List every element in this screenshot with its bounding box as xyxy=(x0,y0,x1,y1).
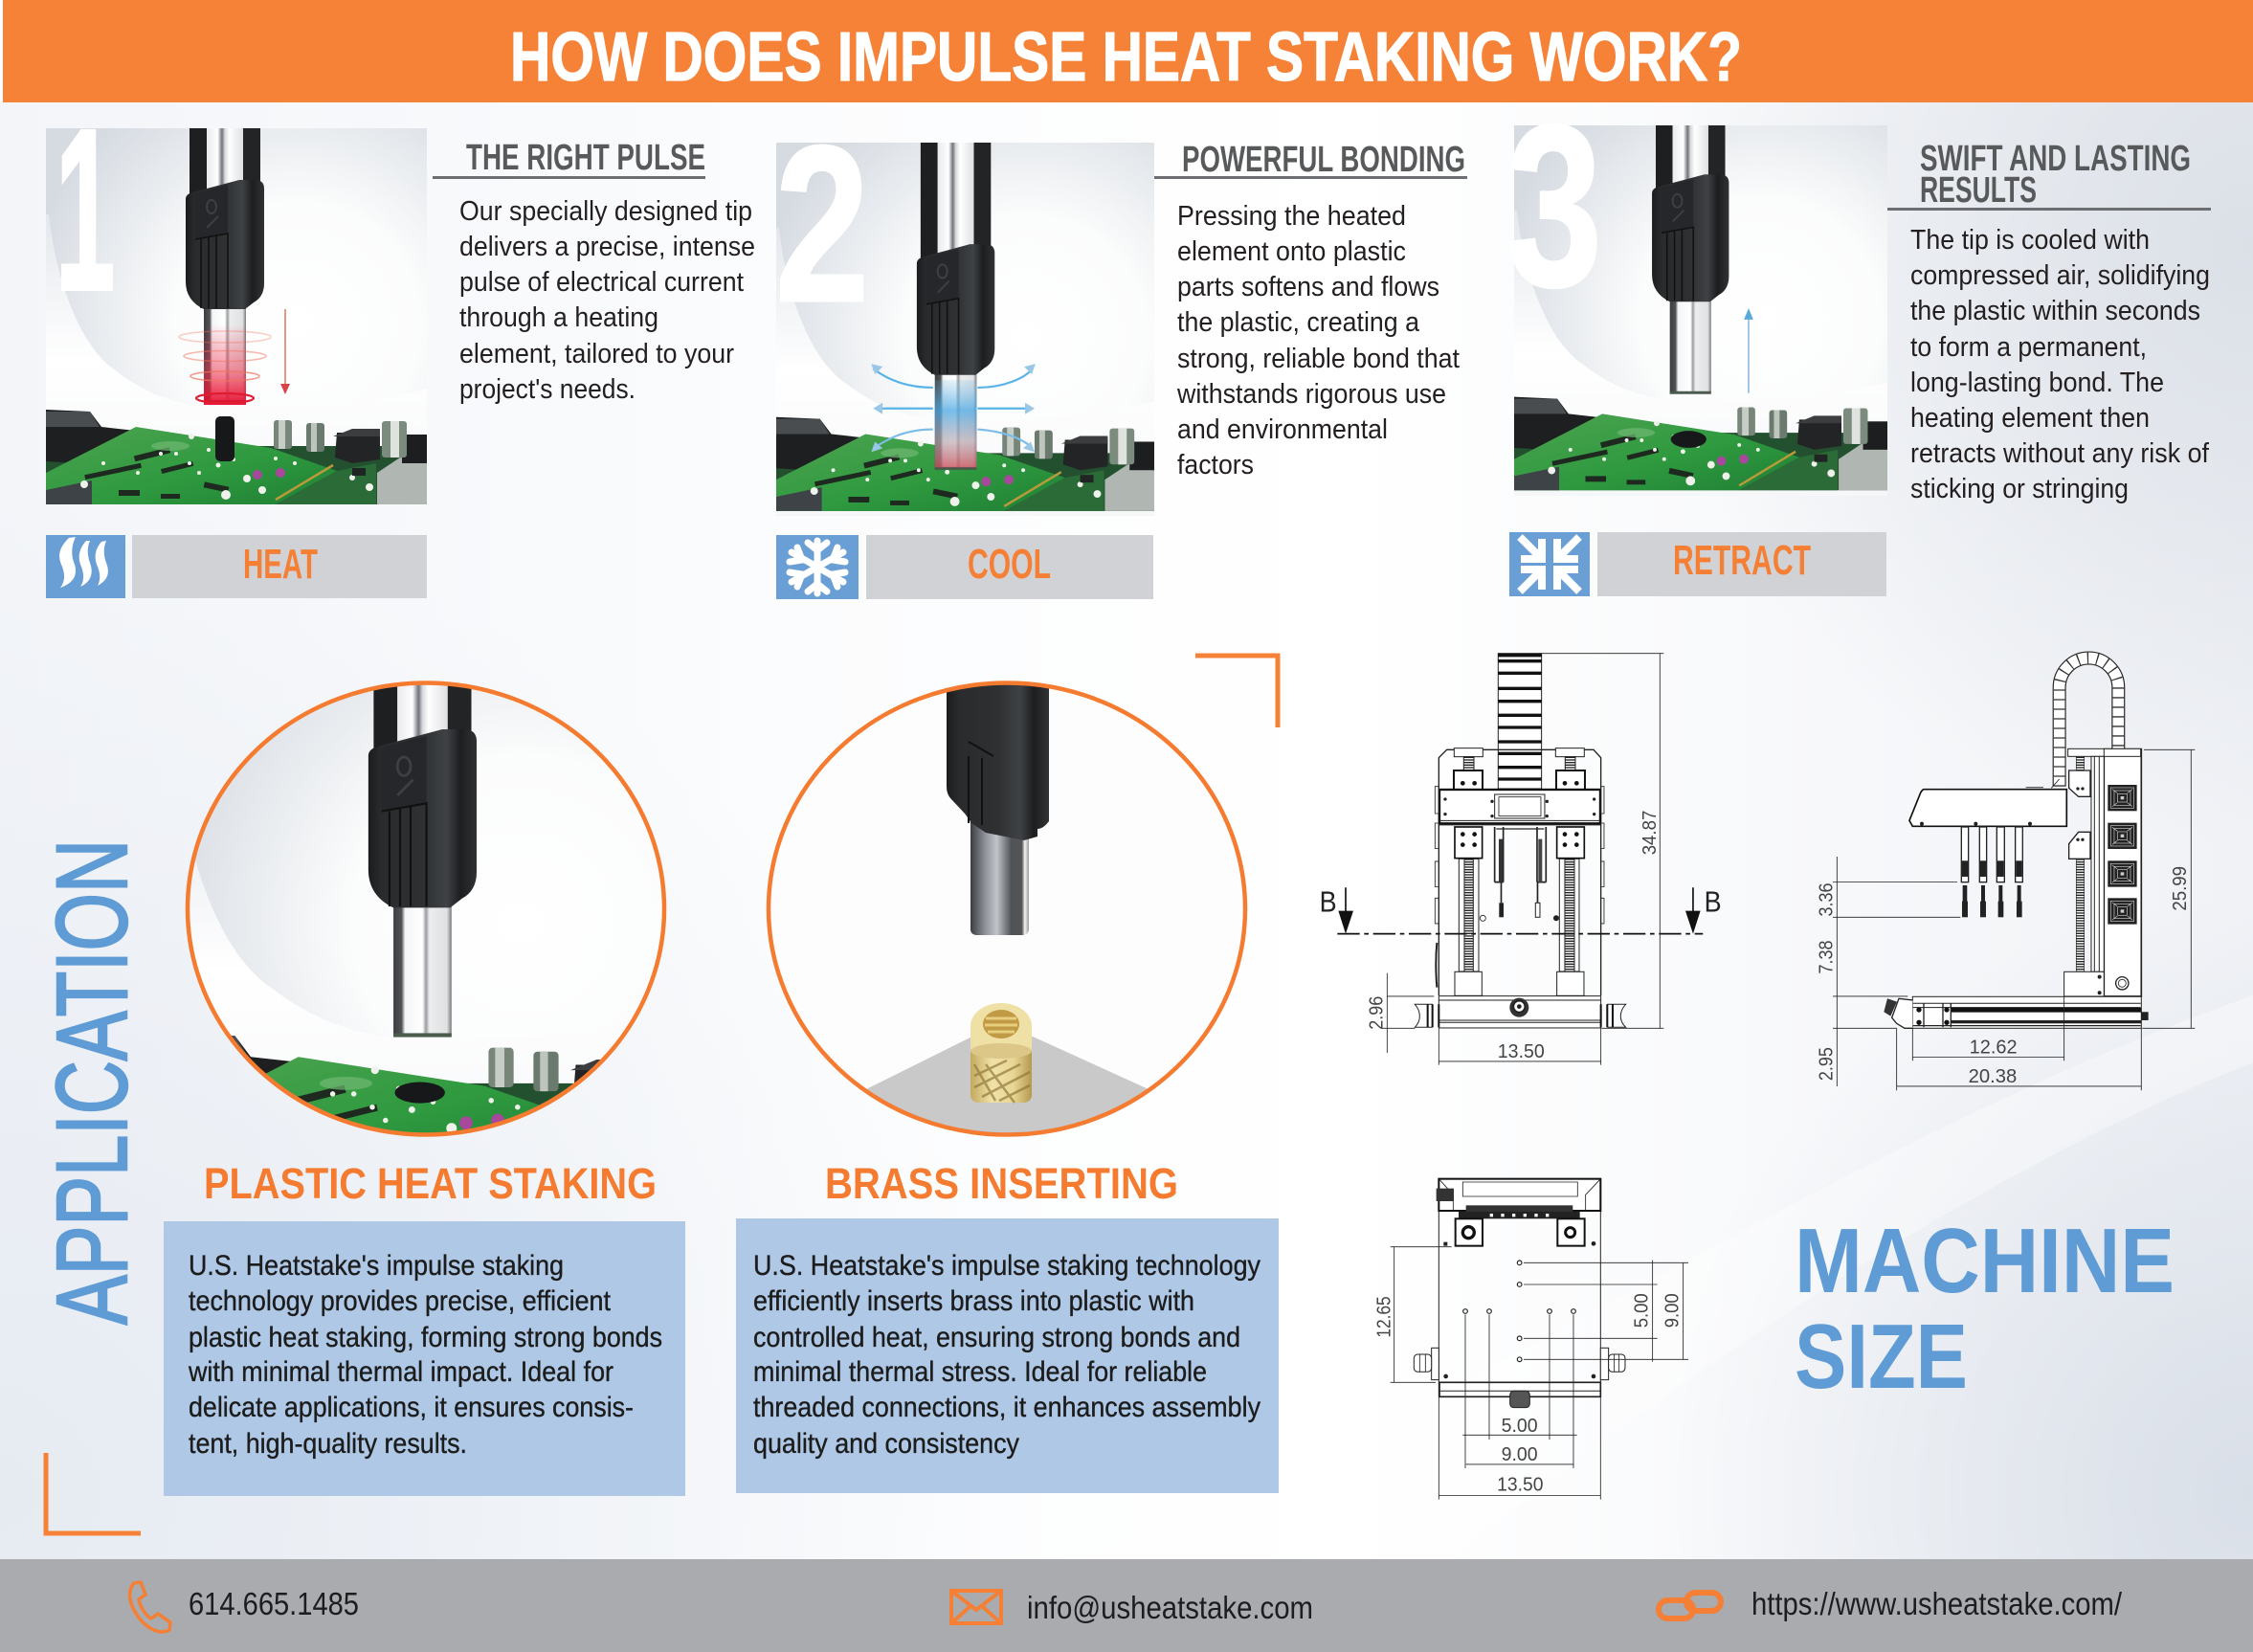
text: step 1 description: project's needs. xyxy=(459,374,636,405)
text box: brass inserting xyxy=(736,1218,1279,1493)
icon: retract arrows xyxy=(1509,532,1590,596)
panel: brass inserting xyxy=(736,670,1279,1493)
text: step 2 description: Pressing the heated xyxy=(1177,201,1406,232)
heading: machine size xyxy=(1795,1210,2175,1408)
label bar: retract xyxy=(1597,532,1886,596)
label bar: retract: RETRACT xyxy=(1673,537,1811,584)
icon: snowflake xyxy=(776,535,859,599)
photo: heat tip above PCB xyxy=(46,128,427,504)
text: step 3 description: to form a permanent, xyxy=(1910,332,2147,363)
technical drawing: front view xyxy=(1320,654,1722,1065)
technical drawing: side view: 3.36 xyxy=(1816,882,1838,916)
header banner xyxy=(3,0,2253,102)
text: step 3 description: sticking or stringing xyxy=(1910,474,2129,504)
title: HOW DOES IMPULSE HEAT STAKING WORK? xyxy=(510,19,1742,96)
photo: tip pressed on PCB with air flow xyxy=(776,143,1154,516)
technical drawing: front view: 34.87 xyxy=(1639,811,1661,855)
technical drawing: side view: 25.99 xyxy=(2169,866,2191,911)
heading: brass inserting: BRASS INSERTING xyxy=(825,1159,1178,1208)
text box: plastic heat staking xyxy=(164,1221,685,1496)
decorative bracket top right of application xyxy=(1195,656,1278,727)
decorative bracket bottom left of application xyxy=(46,1453,141,1533)
photo: tip retracted above bonded stake xyxy=(1514,125,1887,490)
text: step 3 description: The tip is cooled with xyxy=(1910,225,2150,256)
text box: brass inserting: U.S. Heatstake's impulse staking technology xyxy=(753,1250,1260,1282)
panel: step 2 cool xyxy=(775,51,1467,599)
text box: plastic heat staking: tent, high-quality results. xyxy=(189,1428,467,1460)
text box: brass inserting: minimal thermal stress. Ideal for reliable xyxy=(753,1356,1207,1388)
technical drawing: front view: 2.96 xyxy=(1366,996,1388,1030)
text: step 2 description: and environmental xyxy=(1177,414,1388,445)
text box: brass inserting: controlled heat, ensuring strong bonds and xyxy=(753,1322,1240,1353)
text box: brass inserting: threaded connections, it enhances assembly xyxy=(753,1392,1260,1423)
heading: the right pulse: THE RIGHT PULSE xyxy=(466,138,705,178)
icon: envelope xyxy=(951,1591,1001,1623)
circle photo: brass insert and tip xyxy=(766,670,1248,1149)
technical drawing: side view: 12.62 xyxy=(1970,1037,2018,1059)
panel: step 1 heat xyxy=(46,0,755,598)
step number 3: 3 xyxy=(1506,78,1602,334)
text: step 3 description: compressed air, solidifying xyxy=(1910,260,2210,291)
technical drawing: top view: 12.65 xyxy=(1372,1296,1394,1338)
text box: plastic heat staking: with minimal thermal impact. Ideal for xyxy=(188,1356,613,1388)
text: step 2 description: strong, reliable bond that xyxy=(1177,344,1460,374)
heading: machine size: MACHINE xyxy=(1795,1210,2175,1312)
panel: step 1 heat: 1 xyxy=(56,81,115,338)
text box: brass inserting: quality and consistency xyxy=(753,1428,1019,1460)
label bar: heat xyxy=(132,535,427,598)
text: step 2 description: withstands rigorous use xyxy=(1176,379,1446,410)
step number 2: 2 xyxy=(775,100,869,348)
heading: powerful bonding: POWERFUL BONDING xyxy=(1182,140,1465,180)
text: step 2 description: factors xyxy=(1177,450,1254,480)
technical drawing: side view: 2.95 xyxy=(1816,1047,1838,1081)
heading: swift and lasting results: RESULTS xyxy=(1920,170,2037,211)
contact: phone number: 614.665.1485 xyxy=(189,1586,359,1621)
technical drawing: top view: 9.00 xyxy=(1661,1293,1683,1328)
technical drawing: top view: 5.00 xyxy=(1502,1415,1538,1437)
icon: link xyxy=(1659,1593,1721,1619)
technical drawing: top view: 5.00 xyxy=(1631,1293,1653,1328)
text: step 1 description: through a heating xyxy=(459,302,658,333)
footer bar xyxy=(0,1559,2253,1652)
text: step 2 description: the plastic, creating a xyxy=(1177,307,1420,338)
text: step 3 description xyxy=(1910,225,2210,504)
heading: machine size: SIZE xyxy=(1795,1306,1968,1408)
text: step 1 description: element, tailored to your xyxy=(459,339,734,369)
label bar: heat: HEAT xyxy=(243,541,318,588)
circle photo: plastic staking tip xyxy=(186,681,666,1137)
text box: plastic heat staking: delicate applications, it ensures consis- xyxy=(189,1392,634,1423)
text: step 3 description: the plastic within seconds xyxy=(1910,296,2200,326)
technical drawing: top view: 9.00 xyxy=(1502,1443,1538,1465)
technical drawing: top view xyxy=(1372,1179,1688,1500)
vertical heading: application: APPLICATION xyxy=(36,839,148,1325)
label bar: cool: COOL xyxy=(968,541,1051,588)
text box: plastic heat staking: technology provides precise, efficient xyxy=(189,1285,611,1317)
technical drawing: side view: 7.38 xyxy=(1816,940,1838,973)
technical drawing: front view: B xyxy=(1705,886,1722,919)
text: step 1 description: pulse of electrical current xyxy=(459,267,744,298)
technical drawing: front view: B xyxy=(1320,886,1337,919)
text box: plastic heat staking: U.S. Heatstake's impulse staking xyxy=(189,1250,564,1282)
heading: plastic heat staking: PLASTIC HEAT STAKING xyxy=(204,1159,657,1208)
panel: step 3 retract xyxy=(1509,125,2211,596)
panel: plastic heat staking xyxy=(164,681,685,1496)
icon: phone xyxy=(130,1582,170,1632)
text: step 2 description: element onto plastic xyxy=(1177,236,1406,267)
technical drawing: front view: 13.50 xyxy=(1498,1040,1545,1062)
icon: heat waves xyxy=(46,535,125,598)
contact: website: https://www.usheatstake.com/ xyxy=(1751,1586,2123,1621)
heading: swift and lasting results xyxy=(1920,139,2191,211)
text: step 1 description xyxy=(459,196,755,405)
text: step 1 description: Our specially designed tip xyxy=(459,196,752,227)
text: step 3 description: heating element then xyxy=(1910,403,2150,434)
technical drawing: top view: 13.50 xyxy=(1497,1473,1543,1495)
text box: brass inserting: efficiently inserts brass into plastic with xyxy=(753,1285,1194,1317)
text: step 3 description: retracts without any risk of xyxy=(1910,438,2210,469)
text: step 1 description: delivers a precise, intense xyxy=(459,232,755,262)
label bar: cool xyxy=(866,535,1153,599)
contact: email: info@usheatstake.com xyxy=(1027,1590,1313,1625)
technical drawing: side view xyxy=(1816,658,2195,1090)
text box: plastic heat staking: plastic heat staking, forming strong bonds xyxy=(189,1322,662,1353)
technical drawing: side view: 20.38 xyxy=(1969,1065,2017,1087)
text: step 3 description: long-lasting bond. The xyxy=(1910,368,2164,398)
text: step 2 description xyxy=(1176,201,1460,480)
text: step 2 description: parts softens and flows xyxy=(1177,272,1439,302)
